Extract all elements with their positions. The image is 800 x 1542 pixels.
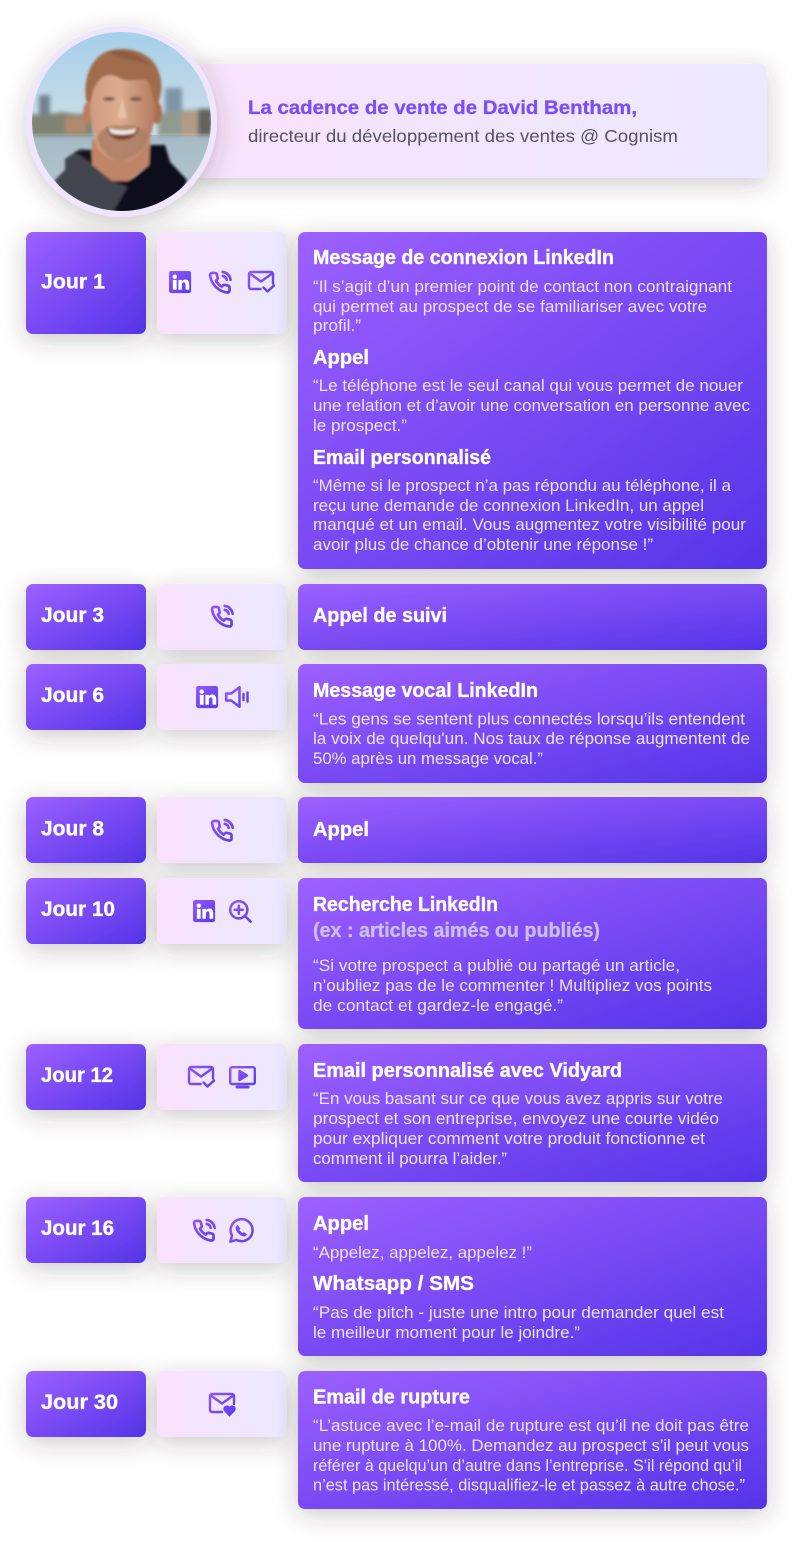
content card: Jour 30: n’est pas intéressé, disqualifiez-le et passez à autre chose.” — [313, 1476, 745, 1494]
row: Jour 6 — [26, 664, 767, 783]
content card: Jour 1: reçu une demande de connexion LinkedIn, un appel — [313, 497, 704, 515]
portrait photo — [26, 26, 217, 217]
day card: Jour 6 — [26, 664, 146, 730]
row: Jour 30 — [26, 1371, 767, 1509]
icon: phone — [212, 820, 233, 840]
day card: Jour 3: Jour 3 — [41, 604, 104, 627]
content card: Jour 1: profil.” — [313, 317, 361, 335]
content card: Jour 1: “Le téléphone est le seul canal qui vous permet de nouer — [313, 377, 744, 395]
content card: Jour 1: “Même si le prospect n’a pas répondu au téléphone, il a — [313, 477, 732, 495]
icon: phone — [212, 606, 233, 626]
icon card: LinkedIn, voice — [157, 664, 287, 730]
icon: WhatsApp — [230, 1219, 253, 1242]
icon: email check — [189, 1067, 214, 1086]
content card: Jour 8 — [298, 797, 767, 863]
icon: video monitor — [230, 1067, 255, 1087]
day card: Jour 1: Jour 1 — [41, 270, 105, 294]
day card: Jour 30: Jour 30 — [41, 1391, 118, 1414]
icon: email with broken heart — [210, 1394, 235, 1416]
icon card: call, WhatsApp — [157, 1197, 287, 1263]
content card: Jour 10 — [298, 878, 767, 1029]
content card: Jour 8: Appel — [313, 819, 369, 841]
icon: LinkedIn — [169, 271, 191, 293]
content card: Jour 16: Appel — [313, 1213, 369, 1235]
content card: Jour 16 — [298, 1197, 767, 1356]
content card: Jour 12: Email personnalisé avec Vidyard — [313, 1060, 622, 1082]
content card: Jour 6: la voix de quelqu'un. Nos taux de réponse augmentent de — [313, 730, 750, 748]
icon card: email, video — [157, 1044, 287, 1110]
content card: Jour 3 — [298, 584, 767, 650]
content card: Jour 10: Recherche LinkedIn — [313, 894, 498, 916]
content card: Jour 12: “En vous basant sur ce que vous avez appris sur votre — [313, 1090, 723, 1108]
content card: Jour 1: qui permet au prospect de se familiariser avec votre — [313, 298, 707, 316]
row: Jour 12 — [26, 1044, 767, 1182]
content card: Jour 1: Email personnalisé — [313, 447, 491, 469]
content card: Jour 1: manqué et un email. Vous augmentez votre visibilité pour — [313, 516, 747, 534]
day card: Jour 6: Jour 6 — [41, 684, 104, 707]
content card: Jour 6: Message vocal LinkedIn — [313, 680, 538, 702]
icon: speaker — [226, 687, 248, 707]
content card: Jour 1 — [298, 232, 767, 569]
day card: Jour 3 — [26, 584, 146, 650]
icon card: breakup email — [157, 1371, 287, 1437]
content card: Jour 10: “Si votre prospect a publié ou partagé un article, — [313, 957, 680, 975]
icon card: LinkedIn, search — [157, 878, 287, 944]
content card: Jour 16: “Appelez, appelez, appelez !” — [313, 1244, 532, 1262]
content card: Jour 30: une rupture à 100%. Demandez au prospect s'il peut vous — [313, 1437, 749, 1455]
content card: Jour 30: “L’astuce avec l’e-mail de rupture est qu’il ne doit pas être — [313, 1417, 749, 1435]
content card: Jour 1: avoir plus de chance d’obtenir une réponse !” — [313, 536, 653, 554]
icon: LinkedIn — [196, 686, 218, 708]
icon: phone — [194, 1220, 215, 1240]
content card: Jour 16: Whatsapp / SMS — [313, 1273, 474, 1295]
panel: header band — [190, 64, 767, 178]
heading: title: La cadence de vente de David Bentham, — [248, 97, 637, 119]
icon: phone — [210, 272, 231, 292]
day card: Jour 1 — [26, 232, 146, 334]
content card: Jour 1: Message de connexion LinkedIn — [313, 247, 614, 269]
day card: Jour 10 — [26, 878, 146, 944]
icon: email check — [249, 272, 274, 292]
content card: Jour 6 — [298, 664, 767, 783]
content card: Jour 3: Appel de suivi — [313, 605, 447, 627]
subtitle: directeur du développement des ventes @ Cognism — [248, 126, 678, 146]
icon card: call — [157, 797, 287, 863]
content card: Jour 1: “Il s’agit d’un premier point de contact non contraignant — [313, 278, 732, 296]
content card: Jour 1: Appel — [313, 347, 369, 369]
row: Jour 1 — [26, 232, 767, 569]
row: Jour 8 — [26, 797, 767, 863]
day card: Jour 8: Jour 8 — [41, 818, 104, 840]
content card: Jour 30: Email de rupture — [313, 1386, 470, 1408]
content card: Jour 1: le prospect.” — [313, 417, 407, 435]
content card: Jour 12: prospect et son entreprise, envoyez une courte vidéo — [313, 1110, 719, 1128]
day card: Jour 8 — [26, 797, 146, 863]
content card: Jour 30 — [298, 1371, 767, 1509]
content card: Jour 16: “Pas de pitch - juste une intro pour demander quel est — [313, 1304, 724, 1322]
content card: Jour 30: référer à quelqu’un d’autre dans l’entreprise. S’il répond qu’il — [313, 1457, 742, 1475]
content card: Jour 12: comment il pourra l’aider.” — [313, 1150, 507, 1168]
content card: Jour 1: une relation et d’avoir une conversation en personne avec — [313, 397, 750, 415]
day card: Jour 16 — [26, 1197, 146, 1263]
icon: magnifier — [230, 901, 251, 922]
day card: Jour 30 — [26, 1371, 146, 1437]
content card: Jour 6: 50% après un message vocal.” — [313, 750, 543, 768]
row: Jour 10 — [26, 878, 767, 1029]
icon card: LinkedIn, call, email — [157, 232, 287, 334]
day card: Jour 12: Jour 12 — [41, 1064, 113, 1087]
day card: Jour 10: Jour 10 — [41, 898, 115, 921]
day card: Jour 12 — [26, 1044, 146, 1110]
content card: Jour 12: pour expliquer comment votre produit fonctionne et — [313, 1130, 705, 1148]
content card: Jour 10: (ex : articles aimés ou publiés) — [313, 920, 600, 942]
day card: Jour 16: Jour 16 — [41, 1217, 114, 1240]
content card: Jour 10: n’oubliez pas de le commenter ! Multipliez vos points — [313, 977, 712, 995]
icon card: call — [157, 584, 287, 650]
content card: Jour 16: le meilleur moment pour le joindre.” — [313, 1324, 580, 1342]
content card: Jour 12 — [298, 1044, 767, 1182]
row: Jour 16 — [26, 1197, 767, 1356]
row: Jour 3 — [26, 584, 767, 650]
content card: Jour 10: de contact et gardez-le engagé.” — [313, 997, 563, 1015]
content card: Jour 6: “Les gens se sentent plus connectés lorsqu’ils entendent — [313, 710, 745, 728]
icon: LinkedIn — [193, 900, 215, 922]
